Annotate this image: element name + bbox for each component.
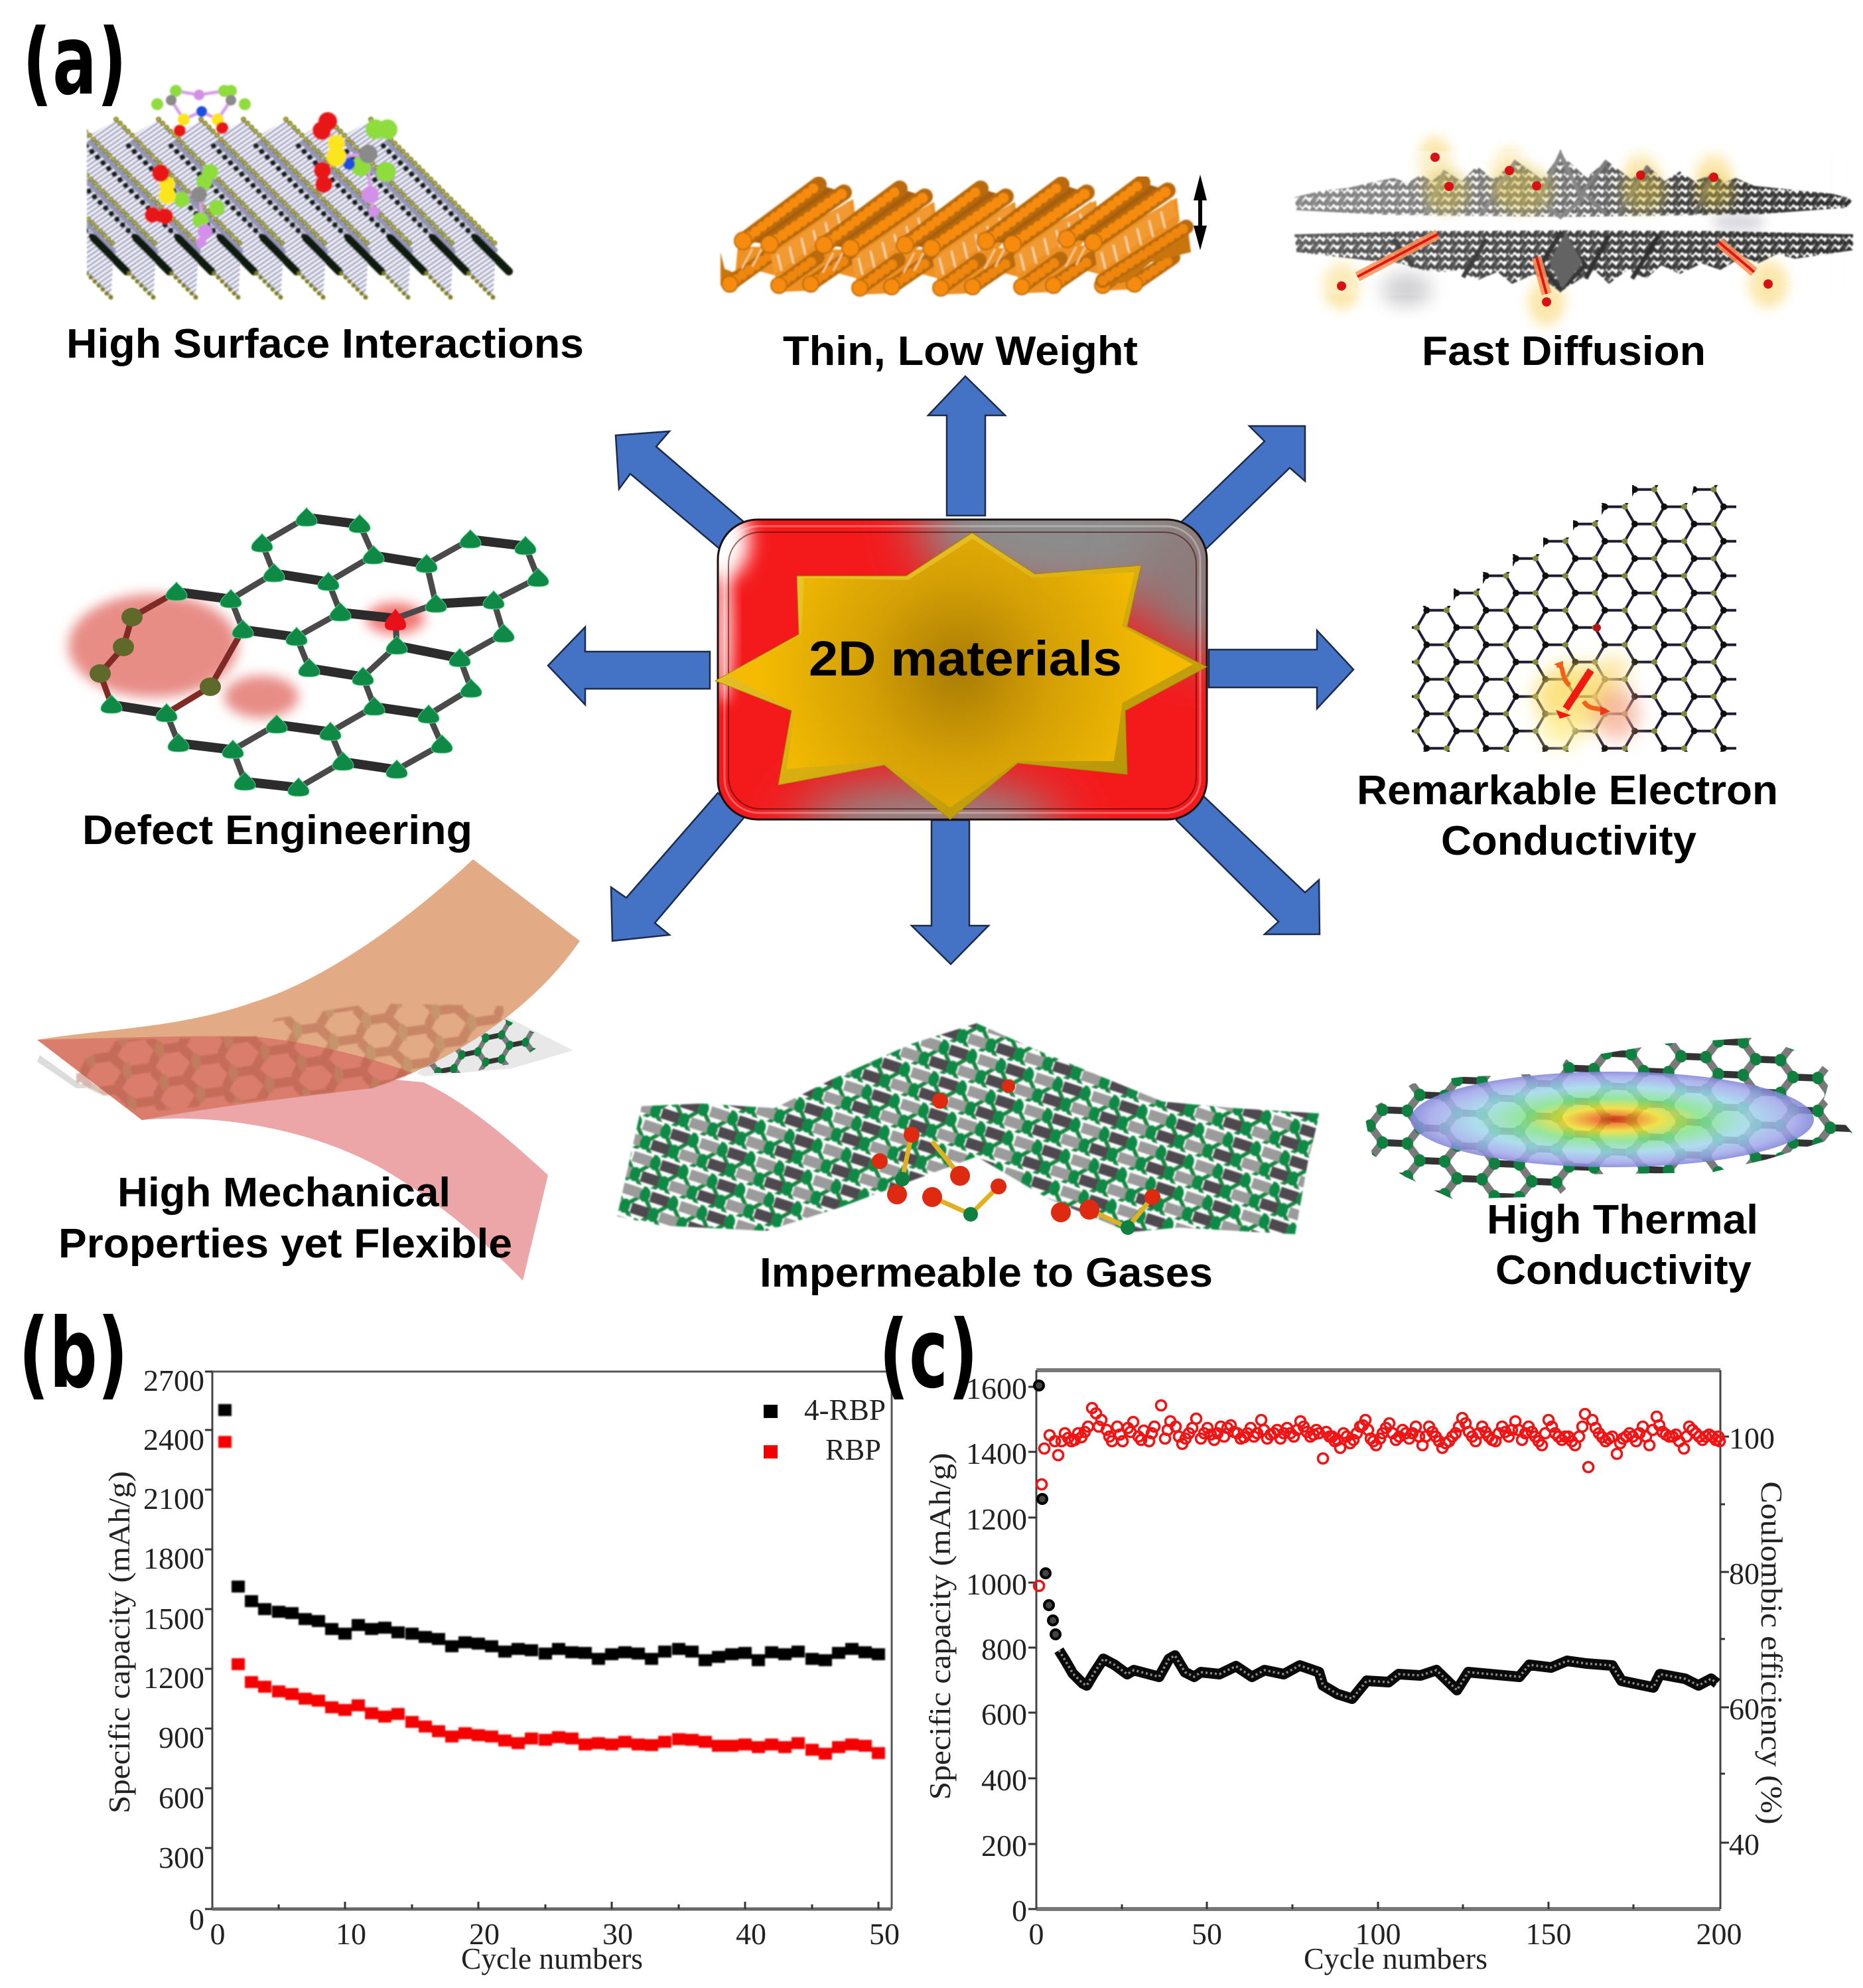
heading: fast diffusion: Fast Diffusion [1422,328,1706,374]
illustration: honeycomb with electron transport arrows [1412,485,1736,752]
heading: high mechanical properties yet flexible: Properties yet Flexible [58,1221,512,1267]
y axis tick labels: 1500 [143,1602,204,1636]
left axis tick labels: 600 [981,1697,1027,1731]
legend: 4-RBP [804,1393,886,1427]
illustration: graphene with vacancy defects [68,508,549,796]
heading: high surface interactions: High Surface Interactions [66,321,584,367]
central box: red gradient rounded rectangle [717,519,1208,820]
illustration: thin orange layered sheet [721,182,1191,296]
arrow: down [912,820,989,964]
y axis tick labels: 2400 [143,1423,204,1456]
icon: double-headed thickness arrow [1194,175,1207,250]
panel: b, cycling chart [102,1364,900,1975]
illustration: rippled membrane over gas molecules [617,1023,1320,1235]
heading: high mechanical properties yet flexible: High Mechanical [117,1170,450,1216]
y axis tick labels: 0 [189,1902,204,1936]
illustration: heat map on graphene [1364,1037,1852,1199]
heading: high thermal conductivity [1487,1197,1758,1293]
panel label c: (c) [879,1297,978,1410]
right axis tick labels: 60 [1729,1692,1760,1726]
heading: high thermal conductivity: High Thermal [1487,1197,1758,1243]
x axis tick labels: 50 [869,1917,900,1951]
heading: remarkable electron conductivity [1357,768,1778,864]
y axis tick labels: 2700 [143,1364,204,1397]
x axis tick labels: 100 [1355,1917,1401,1951]
x axis tick labels [1028,1917,1742,1951]
axes frame [1028,1370,1729,1909]
left axis tick labels: 1400 [966,1437,1027,1470]
axes frame [205,1372,892,1909]
x axis tick labels: 0 [210,1917,226,1951]
arrows radiating from centre [548,376,1353,964]
legend: RBP [825,1433,881,1466]
x axis tick labels: 20 [469,1917,500,1951]
y axis tick labels: 2100 [143,1482,204,1516]
y axis tick labels: 1800 [143,1541,204,1575]
panel label b: (b) [19,1297,128,1410]
arrow: upper left [616,431,746,550]
left axis tick labels: 0 [1012,1894,1027,1928]
left axis tick labels: 400 [981,1763,1027,1797]
left axis tick labels: 1000 [966,1567,1027,1601]
series: 4-RBP black squares [218,1410,885,1660]
x axis tick labels: 200 [1696,1917,1742,1951]
right axis tick labels: 100 [1729,1421,1775,1455]
x axis tick labels: 30 [602,1917,633,1951]
left y axis title: Specific capacity (mAh/g) [923,1453,957,1800]
y axis tick labels: 300 [159,1841,204,1875]
series: RBP red squares [218,1442,885,1754]
arrow: left [548,627,710,705]
illustration: layered sheet with adsorbed molecules [86,84,514,301]
y axis tick labels: 600 [159,1781,204,1815]
heading: remarkable electron conductivity: Conductivity [1441,818,1697,864]
title: 2D materials: 2D materials [809,631,1122,686]
left axis tick labels: 800 [981,1632,1027,1666]
panel: a, properties of 2D materials [0,4,1853,1296]
arrow: up [928,376,1005,516]
x axis title: Cycle numbers [1304,1942,1487,1975]
heading: defect engineering: Defect Engineering [82,808,472,853]
x axis tick labels: 10 [336,1917,366,1951]
y axis title: Specific capacity (mAh/g) [102,1471,136,1813]
left axis tick labels: 1600 [966,1372,1027,1405]
right y axis title: Coulombic efficiency (%) [1755,1481,1789,1825]
series: coulombic efficiency red circles [1039,1405,1720,1586]
x axis tick labels: 150 [1526,1917,1571,1951]
illustration: ions diffusing between two layers [1294,136,1853,326]
arrow: lower right [1176,794,1320,934]
arrow: lower left [611,793,746,941]
y axis tick labels: 900 [159,1721,204,1754]
legend [764,1393,886,1466]
central star shape [715,533,1207,819]
right axis tick labels: 40 [1729,1827,1760,1861]
y axis tick labels [143,1364,204,1936]
arrow: upper right [1180,426,1305,549]
x axis title: Cycle numbers [461,1942,643,1975]
x axis tick labels: 40 [736,1917,766,1951]
x axis tick labels [210,1917,900,1951]
x axis tick labels: 0 [1028,1917,1044,1951]
heading: thin low weight: Thin, Low Weight [783,328,1138,374]
heading: high thermal conductivity: Conductivity [1495,1247,1752,1293]
arrow: right [1209,630,1353,709]
right axis tick labels: 80 [1729,1557,1760,1591]
heading: high mechanical properties yet flexible [58,1170,512,1267]
left axis tick labels [966,1372,1027,1928]
panel label a: (a) [23,4,127,117]
right axis tick labels [1729,1421,1775,1861]
illustration: flexible sheet bending [37,859,580,1281]
left axis tick labels: 200 [981,1829,1027,1863]
y axis tick labels: 1200 [143,1661,204,1695]
x axis tick labels: 50 [1192,1917,1222,1951]
heading: remarkable electron conductivity: Remarkable Electron [1357,768,1778,814]
heading: impermeable to gases: Impermeable to Gases [760,1250,1213,1296]
panel: c, long cycling chart [923,1370,1789,1975]
left axis tick labels: 1200 [966,1502,1027,1536]
series: specific capacity black circles [1039,1385,1717,1699]
